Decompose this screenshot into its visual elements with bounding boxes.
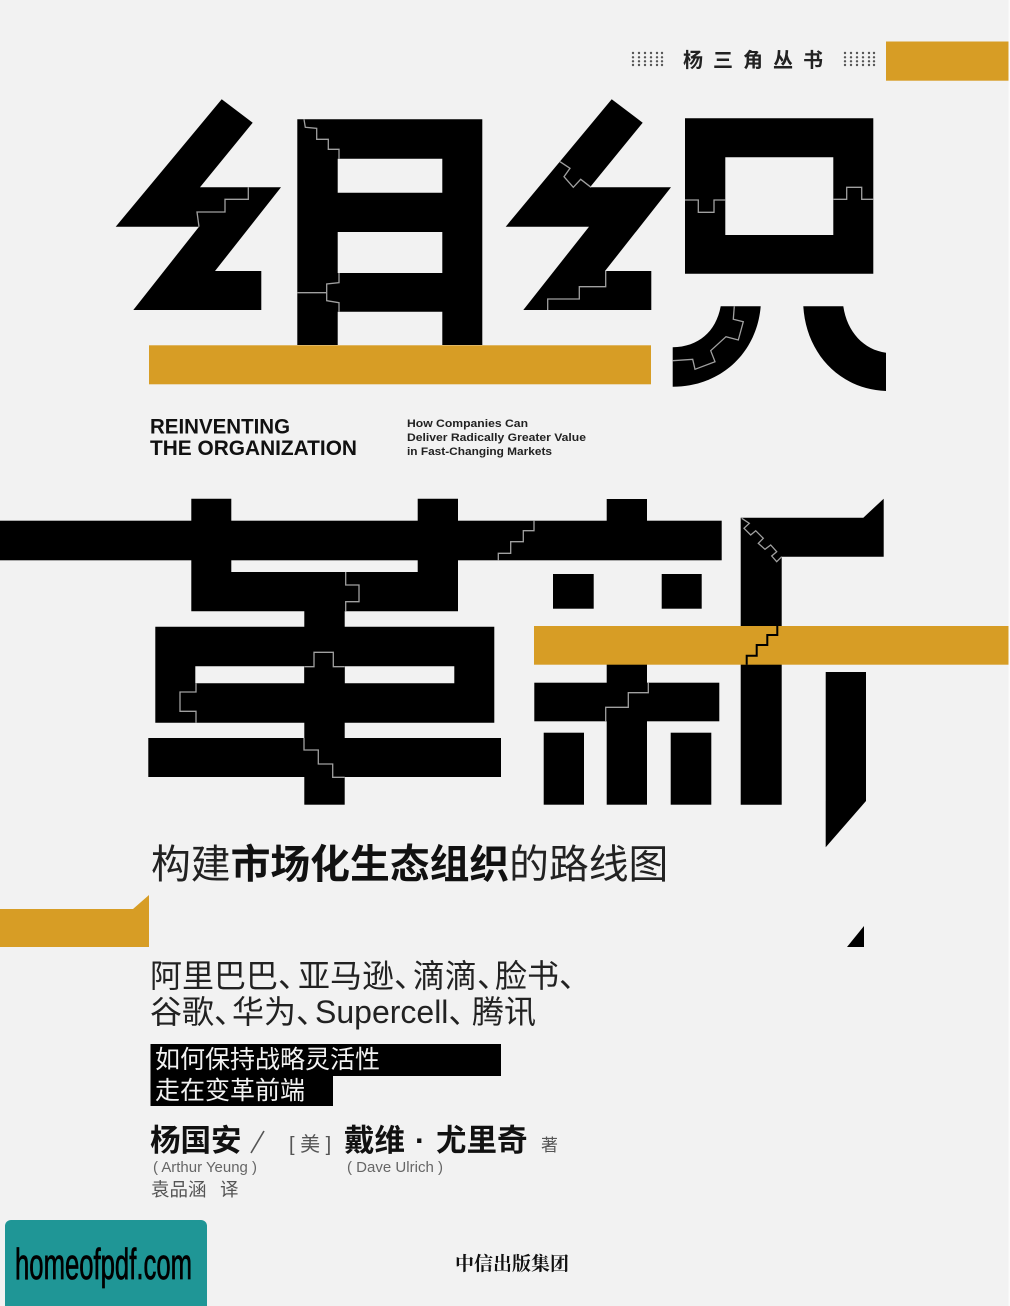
- author: 戴维·尤里奇: ( Dave Ulrich ): [347, 1159, 443, 1176]
- watermark badge: homeofpdf.com: [15, 1240, 192, 1289]
- title character: 组: [116, 99, 482, 345]
- english subtitle: in Fast-Changing Markets: [407, 446, 552, 458]
- translator: 袁品涵: [151, 1179, 207, 1200]
- watermark badge: [5, 1220, 207, 1306]
- english subtitle: Deliver Radically Greater Value: [407, 432, 586, 444]
- company list: 滴滴、: [413, 958, 509, 994]
- subtitle: 构建市场化生态组织的路线图: 构建市场化生态组织的路线图: [151, 843, 668, 887]
- company list: Supercell、: [315, 994, 480, 1030]
- english title: THE ORGANIZATION: [150, 437, 357, 460]
- author: 戴维·尤里奇: 戴维: [344, 1124, 405, 1158]
- company list: [150, 958, 591, 1030]
- gold bar under 组织: [149, 345, 651, 384]
- author: 戴维·尤里奇: 尤里奇: [436, 1124, 528, 1158]
- gold notched bar left: [0, 895, 149, 947]
- author: 戴维·尤里奇: [289, 1124, 558, 1176]
- author: 戴维·尤里奇: 著: [541, 1136, 558, 1155]
- 组 left radical: [116, 99, 281, 310]
- english title: [150, 416, 357, 460]
- author: 杨国安: [150, 1124, 257, 1176]
- english subtitle: [407, 418, 586, 458]
- title character: 革: [0, 499, 722, 805]
- title character: 织: [506, 99, 886, 391]
- 织 right stroke: [803, 306, 886, 391]
- small black triangle: [847, 926, 864, 947]
- author: 戴维·尤里奇: ·: [415, 1124, 425, 1158]
- 组 right part: [297, 119, 482, 345]
- black highlighted tagline: [150, 1044, 501, 1106]
- 织 left radical: [506, 99, 671, 310]
- author: 戴维·尤里奇: [ 美 ]: [289, 1133, 331, 1156]
- translator: 译: [220, 1179, 239, 1200]
- author: 杨国安: ( Arthur Yeung ): [153, 1159, 257, 1176]
- dot grid left: [632, 52, 663, 66]
- black highlighted tagline: 走在变革前端: [155, 1077, 305, 1105]
- 织 left stroke: [673, 306, 761, 387]
- company list: 亚马逊、: [298, 958, 426, 994]
- company list: 腾讯: [472, 994, 536, 1030]
- company list: 阿里巴巴、: [150, 958, 310, 994]
- english subtitle: How Companies Can: [407, 418, 528, 430]
- black seam on gold bar: [747, 626, 777, 665]
- 织 box: [685, 118, 873, 274]
- publisher: 中信出版集团: [455, 1253, 569, 1275]
- author: 杨国安: 杨国安: [150, 1124, 242, 1158]
- shared top bar: [0, 521, 722, 560]
- english title: REINVENTING: [150, 416, 290, 438]
- company list: 华为、: [232, 994, 328, 1030]
- dot grid right: [844, 52, 875, 66]
- company list: 谷歌、: [150, 994, 246, 1030]
- series name: 杨三角丛书: [683, 48, 833, 72]
- gold bar across 新: [534, 626, 1008, 665]
- black highlighted tagline: 如何保持战略灵活性: [155, 1046, 380, 1074]
- title character: 新: [498, 499, 884, 847]
- series label: 杨三角丛书: [632, 48, 875, 72]
- gold bar: top right: [886, 42, 1008, 81]
- slash divider: [251, 1131, 264, 1153]
- company list: 脸书、: [495, 958, 591, 994]
